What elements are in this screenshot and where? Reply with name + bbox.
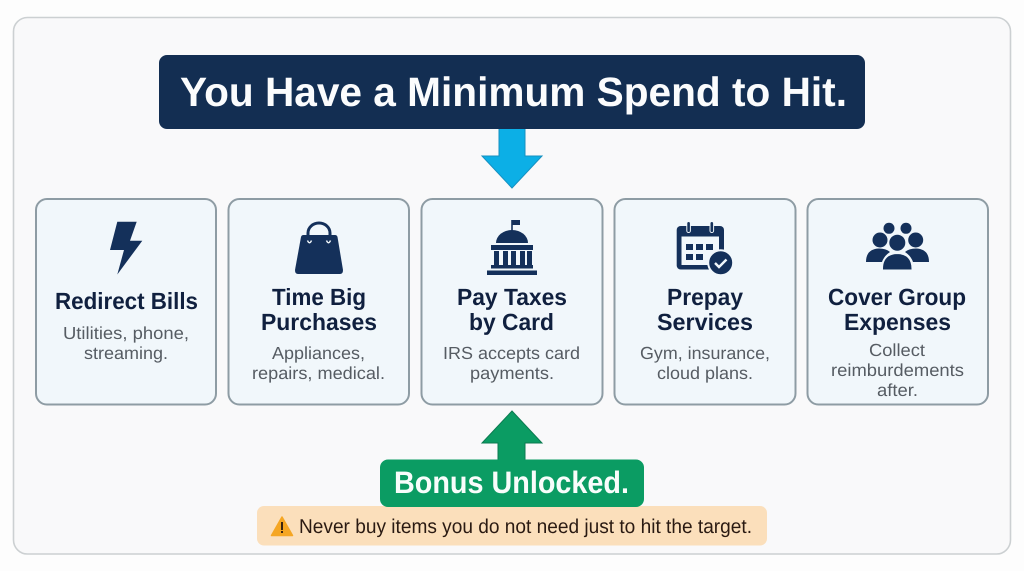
description: cover group expenses: reimburdements [831,360,964,380]
heading: time big purchases: Purchases [261,309,377,335]
heading: cover group expenses: Expenses [844,309,951,335]
heading: pay taxes by card: by Card [469,309,554,335]
title banner [159,55,865,129]
description: prepay services: cloud plans. [657,363,753,383]
panel: prepay services [614,199,796,404]
description: prepay services: Gym, insurance, [640,343,770,363]
icon: group of people [866,223,929,270]
heading: prepay services [657,284,753,335]
heading: prepay services: Prepay [667,284,743,310]
description: pay taxes by card: payments. [470,363,554,383]
description: time big purchases: Appliances, [272,343,365,363]
heading: pay taxes by card: Pay Taxes [457,284,567,310]
description: cover group expenses [831,340,964,400]
bonus unlocked badge [380,460,644,507]
description: pay taxes by card: IRS accepts card [443,343,580,363]
description: redirect bills: streaming. [84,343,168,363]
arrow: blue down arrow [482,125,542,188]
warning strip [257,506,767,546]
arrow: green up arrow [482,411,542,464]
heading: time big purchases: Time Big [272,284,366,310]
warning text: Never buy items you do not need just to hit the target. [299,516,752,538]
icon: government building [487,220,537,275]
panel: pay taxes by card [422,199,602,404]
description: redirect bills [63,323,189,363]
description: time big purchases: repairs, medical. [252,363,385,383]
heading: cover group expenses: Cover Group [828,284,966,310]
heading: cover group expenses [828,284,966,335]
description: redirect bills: Utilities, phone, [63,323,189,343]
panel: cover group expenses [808,199,988,404]
description: prepay services [640,343,770,383]
panel: redirect bills [36,199,216,404]
panel: time big purchases [228,199,409,404]
icon: warning triangle [272,517,292,536]
heading: prepay services: Services [657,309,753,335]
description: cover group expenses: after. [877,380,918,400]
heading: pay taxes by card [457,284,567,335]
description: cover group expenses: Collect [869,340,925,360]
icon: calendar with check [677,222,733,275]
title banner: You Have a Minimum Spend to Hit. [180,69,847,115]
heading: redirect bills: Redirect Bills [55,288,198,314]
heading: time big purchases [261,284,377,335]
description: pay taxes by card [443,343,580,383]
bonus unlocked badge: Bonus Unlocked. [394,465,629,500]
icon: lightning bolt [110,222,142,274]
icon: shopping bag [295,223,343,274]
description: time big purchases [252,343,385,383]
